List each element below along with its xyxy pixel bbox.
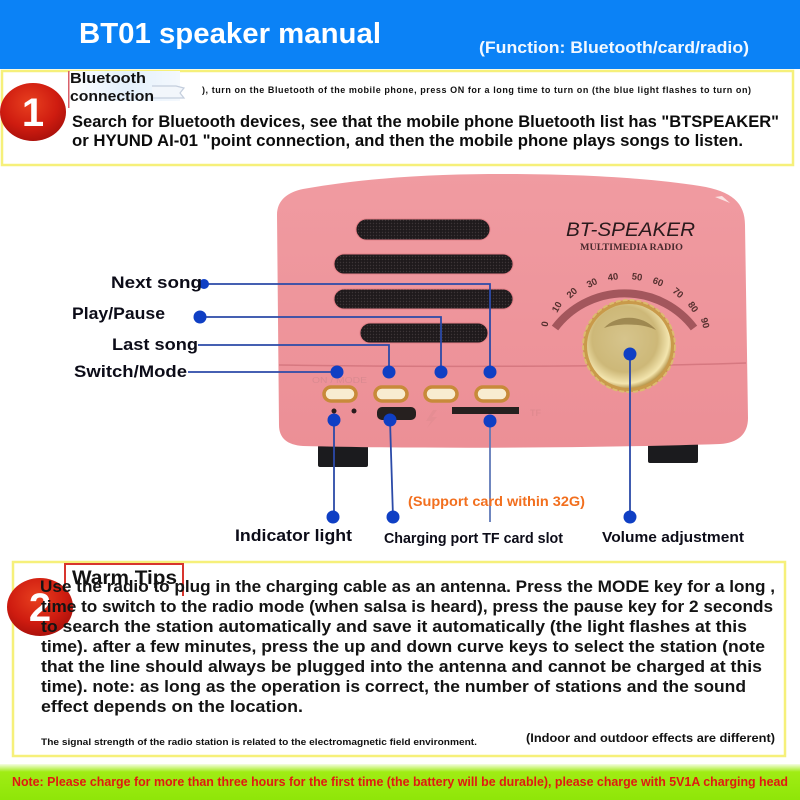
support card note: (Support card within 32G) [408,493,585,509]
icon: step 1 badge: 1 [22,91,44,135]
bottom note band [0,764,800,800]
callout labels [72,274,744,547]
warm tips heading [65,564,183,596]
radio speaker illustration: MULTIMEDIA RADIO [580,243,683,253]
indoor outdoor note: (Indoor and outdoor effects are different) [526,731,775,745]
header band [0,0,800,69]
tuning dial scale: 20 [565,286,580,301]
title: BT01 speaker manual [79,18,381,50]
signal strength note: The signal strength of the radio station is related to the electromagnetic field environment. [41,737,477,748]
bluetooth connection icon label: Bluetooth [70,71,146,87]
step 1 body text: or HYUND AI-01 "point connection, and then the mobile phone plays songs to listen. [72,131,743,150]
callout labels: Play/Pause [72,305,165,323]
step 2 body text: time). after a few minutes, press the up and down curve keys to select the station (note [41,637,765,656]
button caption: ON / MODE [312,376,367,385]
tuning dial scale: 10 [550,300,565,315]
speaker grille slots [334,219,513,343]
callout labels: Charging port TF card slot [384,531,563,547]
callout lines and dots [188,279,636,524]
tuning dial scale: 30 [585,276,599,291]
icon: step 2 badge: 2 [29,586,51,630]
step 2 body text: that the line should always be plugged into the antenna and cannot be charged at this [41,657,762,676]
step 2 body text: effect depends on the location. [41,697,303,716]
tuning dial scale: 60 [651,275,665,290]
callout labels: Switch/Mode [74,363,187,381]
icon: charge bolt [426,410,437,428]
panel: step 1 Bluetooth connection [0,71,793,165]
callout labels: Volume adjustment [602,530,744,546]
icon: step 2 badge [7,578,73,636]
feet [318,441,698,467]
radio speaker illustration [277,174,748,467]
tuning dial scale: 50 [631,271,643,284]
step 2 body text: time to switch to the radio mode (when salsa is heard), press the pause key for 2 seconds [41,597,773,616]
tuning dial scale: 70 [670,286,685,301]
bluetooth connection icon label [68,71,184,108]
TF card slot [452,407,541,418]
TF card slot: TF [530,408,541,418]
step 2 body text [40,577,775,716]
warm tips heading: Warm Tips [72,568,177,589]
brand text: BT-SPEAKER [566,220,695,241]
callout labels: Indicator light [235,527,353,545]
charging note: Note: Please charge for more than three hours for the first time (the battery will be durable), please charge with 5V1A charging head [12,775,788,789]
control buttons [324,387,508,401]
step 2 body text: to search the station automatically and save it automatically (the light flashes at this [41,617,747,636]
panel: step 2 Warm Tips [7,562,785,756]
volume knob [583,300,675,392]
callout labels: Next song [111,274,202,292]
step 2 body text: Use the radio to plug in the charging cable as an antenna. Press the MODE key for a long , [40,577,775,596]
function subtitle: (Function: Bluetooth/card/radio) [479,39,749,57]
radio body [277,174,748,448]
bluetooth connection icon label: connection [70,89,154,105]
step 1 body text [72,112,779,150]
icon: step 1 badge [0,83,66,141]
tuning dial scale: 0 [540,321,551,328]
charging port [377,407,416,420]
indicator dots [332,408,356,414]
tuning dial scale: 40 [607,271,619,284]
tuning dial scale [540,271,711,330]
callout labels: Last song [112,336,198,354]
step 1 body text: Search for Bluetooth devices, see that the mobile phone Bluetooth list has "BTSPEAKER" [72,112,779,131]
step 1 small instructions: ), turn on the Bluetooth of the mobile phone, press ON for a long time to turn on (the blue light flashes to turn on) [202,85,751,95]
step 2 body text: time). note: as long as the operation is correct, the number of stations and the sound [41,677,746,696]
tuning dial scale: 90 [698,317,711,330]
tuning dial scale: 80 [685,300,700,315]
